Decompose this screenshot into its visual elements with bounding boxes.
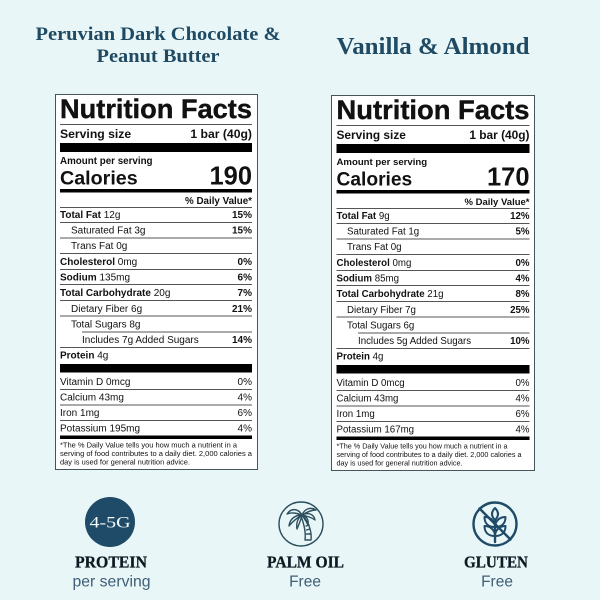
heading: Peruvian Dark Chocolate & Peanut Butter: Peruvian Dark Chocolate & xyxy=(36,24,280,45)
vitamins and minerals: 4% xyxy=(238,424,252,434)
nutrient rows: 12% xyxy=(510,211,530,222)
calories block: Calories xyxy=(336,170,412,190)
nutrient rows: Dietary Fiber 6g xyxy=(71,304,142,315)
nutrient rows: 8% xyxy=(515,289,530,300)
vitamins and minerals: 4% xyxy=(515,424,530,436)
nutrient rows: Includes 7g Added Sugars xyxy=(82,335,199,346)
label: gluten free xyxy=(464,552,528,590)
footnote: *The % Daily Value tells you how much a nutrient in a xyxy=(60,442,237,450)
nutrient rows: 10% xyxy=(510,336,530,347)
nutrient rows: 14% xyxy=(232,335,252,346)
icon: 4-5G protein badge: 4-5G xyxy=(90,514,130,532)
nutrient rows: Sodium 85mg xyxy=(336,274,399,284)
vitamins and minerals xyxy=(336,378,530,440)
label: palm oil free: Free xyxy=(289,574,321,590)
vitamins and minerals: 4% xyxy=(238,392,252,404)
serving size row xyxy=(60,124,252,152)
nutrient rows: 6% xyxy=(238,272,252,284)
nutrient rows: Total Sugars 8g xyxy=(71,320,140,330)
heading: Vanilla & Almond: Vanilla & Almond xyxy=(336,34,530,60)
nutrient rows: 5% xyxy=(515,226,530,238)
serving size row xyxy=(336,126,530,153)
vitamins and minerals: Iron 1mg xyxy=(336,409,375,420)
calories block: Amount per serving xyxy=(60,156,153,167)
icon: 4-5G protein badge xyxy=(85,497,135,547)
vitamins and minerals: 0% xyxy=(515,378,530,389)
footnote xyxy=(336,444,522,468)
serving size row: 1 bar (40g) xyxy=(469,128,530,142)
calories block xyxy=(60,156,252,207)
nutrient rows: 7% xyxy=(238,288,252,299)
nutrient rows: Total Carbohydrate 21g xyxy=(336,289,443,300)
label: gluten free: GLUTEN xyxy=(464,552,528,572)
nutrient rows: Includes 5g Added Sugars xyxy=(358,336,471,347)
vitamins and minerals: Potassium 195mg xyxy=(60,424,140,434)
calories block: 170 xyxy=(487,164,530,192)
nutrient rows: 15% xyxy=(232,226,252,236)
nutrient rows: 0% xyxy=(515,258,530,269)
footnote: *The % Daily Value tells you how much a nutrient in a xyxy=(336,444,508,450)
nutrient rows xyxy=(336,208,530,374)
nutrient rows: Total Carbohydrate 20g xyxy=(60,288,170,299)
nutrient rows: 4% xyxy=(515,274,530,284)
vitamins and minerals: Calcium 43mg xyxy=(336,394,398,404)
footnote: serving of food contributes to a daily diet. 2,000 calories a xyxy=(336,452,522,459)
nutrient rows: Protein 4g xyxy=(60,350,108,362)
calories block: Amount per serving xyxy=(336,157,427,168)
vitamins and minerals: Iron 1mg xyxy=(60,408,99,419)
nutrient rows: Saturated Fat 3g xyxy=(71,226,146,236)
serving size row: 1 bar (40g) xyxy=(190,127,252,141)
panel: nutrition facts, Vanilla & Almond xyxy=(332,95,534,470)
heading: Peruvian Dark Chocolate & Peanut Butter xyxy=(36,24,280,67)
nutrient rows: Sodium 135mg xyxy=(60,272,130,284)
vitamins and minerals: Vitamin D 0mcg xyxy=(336,378,405,389)
calories block xyxy=(336,157,530,208)
calories block: Calories xyxy=(60,168,138,190)
nutrient rows: 21% xyxy=(232,304,252,315)
calories block: % Daily Value* xyxy=(465,197,530,208)
serving size row: Serving size xyxy=(336,128,406,142)
footnote: serving of food contributes to a daily diet. 2,000 calories a xyxy=(60,451,252,458)
footnote: day is used for general nutrition advice. xyxy=(60,460,190,466)
nutrient rows: Cholesterol 0mg xyxy=(60,257,137,268)
label: gluten free: Free xyxy=(481,574,513,590)
vitamins and minerals: Potassium 167mg xyxy=(336,424,414,436)
label: palm oil free: PALM OIL xyxy=(267,552,344,572)
panel: nutrition facts, Peruvian Dark Chocolate & Peanut Butter xyxy=(56,94,258,470)
nutrient rows: 25% xyxy=(510,305,530,316)
vitamins and minerals: Vitamin D 0mcg xyxy=(60,377,130,388)
vitamins and minerals: 6% xyxy=(515,409,530,420)
footnote: day is used for general nutrition advice. xyxy=(336,460,463,468)
calories block: % Daily Value* xyxy=(185,196,252,207)
calories block: 190 xyxy=(209,162,252,190)
vitamins and minerals: Calcium 43mg xyxy=(60,392,124,404)
icon: gluten free wheat in crossed circle xyxy=(474,502,516,546)
vitamins and minerals: 0% xyxy=(238,377,252,388)
label title: Nutrition Facts xyxy=(336,95,530,125)
footnote xyxy=(60,442,252,466)
icon: palm tree in circle xyxy=(279,502,323,546)
heading: Peruvian Dark Chocolate & Peanut Butter: Peanut Butter xyxy=(96,46,220,67)
nutrient rows: Total Sugars 6g xyxy=(347,320,414,332)
nutrient rows: Dietary Fiber 7g xyxy=(347,305,416,316)
label: protein per serving: per serving xyxy=(72,574,150,590)
nutrient rows: 0% xyxy=(238,257,252,268)
label title: Nutrition Facts xyxy=(60,94,252,124)
nutrient rows xyxy=(60,208,252,372)
label: palm oil free xyxy=(267,552,344,590)
label: protein per serving xyxy=(72,552,150,590)
nutrient rows: Cholesterol 0mg xyxy=(336,258,411,269)
vitamins and minerals: 4% xyxy=(515,394,530,404)
nutrient rows: Trans Fat 0g xyxy=(347,242,402,253)
nutrient rows: Total Fat 9g xyxy=(336,211,390,222)
nutrient rows: Saturated Fat 1g xyxy=(347,226,419,238)
label: protein per serving: PROTEIN xyxy=(75,552,147,572)
nutrient rows: Protein 4g xyxy=(336,352,383,362)
vitamins and minerals: 6% xyxy=(238,408,252,419)
serving size row: Serving size xyxy=(60,127,131,141)
nutrient rows: 15% xyxy=(232,210,252,221)
vitamins and minerals xyxy=(60,377,252,439)
nutrient rows: Total Fat 12g xyxy=(60,210,120,221)
nutrient rows: Trans Fat 0g xyxy=(71,241,127,252)
